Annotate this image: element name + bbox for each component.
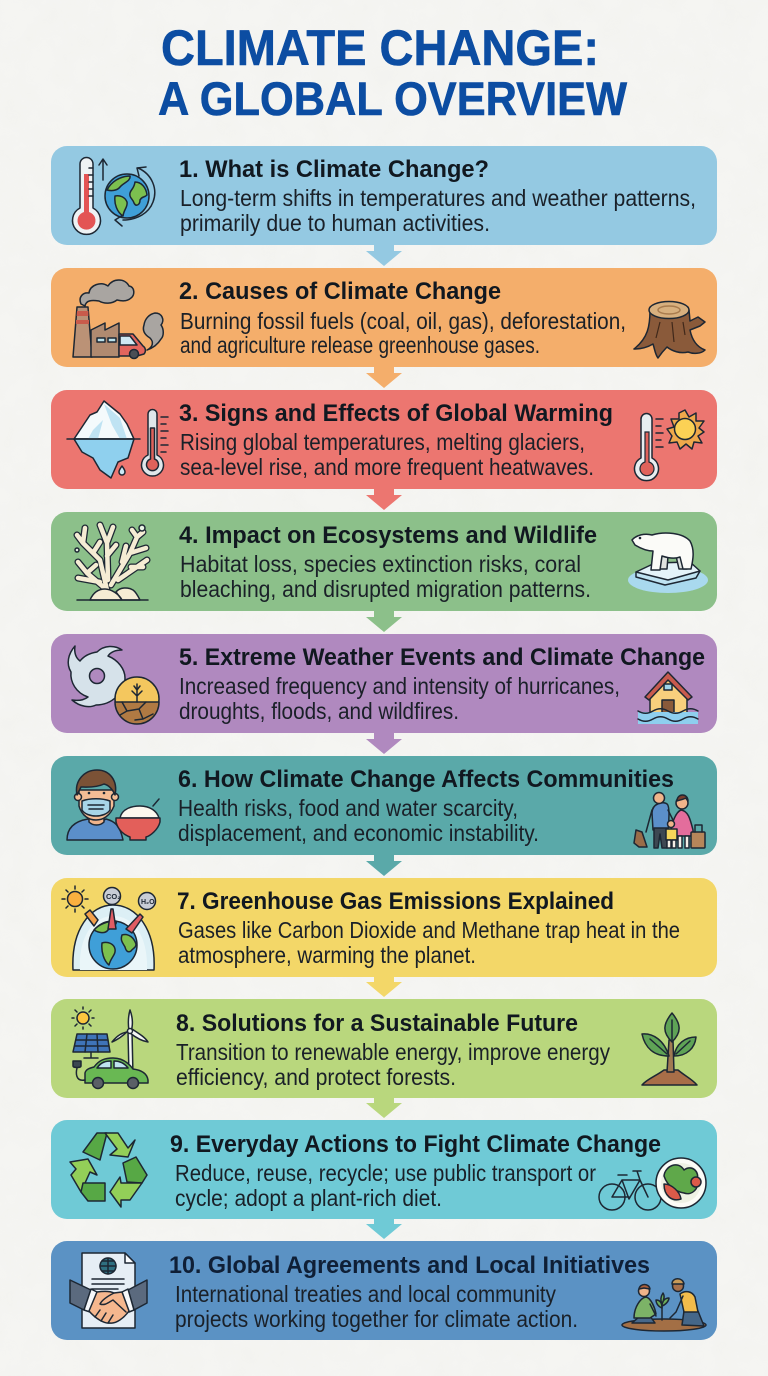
panel 10: agreements and initiatives (51, 1241, 717, 1340)
panel 3 body: Rising global temperatures, melting glaciers, (180, 429, 585, 455)
panel 9 heading: 9. Everyday Actions to Fight Climate Change (170, 1131, 661, 1158)
icon: displaced family with suitcases (634, 792, 705, 848)
panel 9 body: Reduce, reuse, recycle; use public transport or (175, 1160, 596, 1186)
panel 5 body: droughts, floods, and wildfires. (179, 698, 459, 724)
panel 8 heading: 8. Solutions for a Sustainable Future (176, 1010, 578, 1037)
panel 6 heading: 6. How Climate Change Affects Communities (178, 766, 674, 793)
panel 3 heading: 3. Signs and Effects of Global Warming (179, 400, 613, 427)
icon: recycling symbol (70, 1133, 147, 1207)
panel 6 background (51, 756, 717, 855)
panel 7 heading: 7. Greenhouse Gas Emissions Explained (177, 888, 614, 915)
panel 6 body (178, 795, 539, 846)
panel 2 background (51, 268, 717, 367)
panel 2 body: and agriculture release greenhouse gases. (180, 332, 540, 358)
arrow: panel 1 to 2 (366, 245, 402, 266)
arrow: panel 5 to 6 (366, 733, 402, 754)
icon: solar panel, wind turbine and electric car (72, 1007, 148, 1088)
arrow: panel 9 to 10 (366, 1219, 402, 1239)
panel 5 body: Increased frequency and intensity of hurricanes, (179, 673, 620, 699)
panel 7: greenhouse gases (51, 878, 717, 977)
icon: greenhouse effect diagram: H₂O (141, 899, 155, 906)
panel 8 body: Transition to renewable energy, improve energy (176, 1039, 610, 1065)
panel 1 body: primarily due to human activities. (180, 210, 490, 236)
panel 9 background (51, 1120, 717, 1219)
panel 1: what is climate change (51, 146, 717, 245)
panel 10 body (175, 1281, 578, 1332)
panel 4: ecosystems (51, 512, 717, 611)
panel 10 heading: 10. Global Agreements and Local Initiatives (169, 1252, 650, 1279)
panel 10 body: International treaties and local community (175, 1281, 556, 1307)
panel 3: signs and effects (51, 390, 717, 489)
panel 7 body: atmosphere, warming the planet. (178, 942, 476, 968)
arrow: panel 8 to 9 (366, 1098, 402, 1118)
panel 4 body: bleaching, and disrupted migration patterns. (180, 576, 591, 602)
icon: greenhouse effect diagram (62, 886, 156, 970)
icon: polar bear on ice (628, 533, 708, 593)
panel 4 background (51, 512, 717, 611)
arrow: panel 2 to 3 (366, 367, 402, 388)
icon: thermometer and rotating globe (72, 158, 155, 234)
panel 1 background (51, 146, 717, 245)
icon: tree stump (634, 302, 705, 358)
panel 8 background (51, 999, 717, 1098)
title: A GLOBAL OVERVIEW (158, 72, 628, 125)
panel 7 background (51, 878, 717, 977)
panel 1 body (180, 185, 696, 236)
icon: seedling (642, 1013, 697, 1085)
panel 3 background (51, 390, 717, 489)
panel 5: extreme weather (51, 634, 717, 733)
panel 1 heading: 1. What is Climate Change? (179, 156, 489, 183)
panel 3 body: sea-level rise, and more frequent heatwaves. (180, 454, 594, 480)
panel 10 body: projects working together for climate action. (175, 1306, 578, 1332)
panel 8 body (176, 1039, 610, 1090)
title (158, 20, 628, 125)
panel 4 heading: 4. Impact on Ecosystems and Wildlife (179, 522, 597, 549)
title: CLIMATE CHANGE: (161, 20, 599, 76)
panel 6 body: displacement, and economic instability. (178, 820, 539, 846)
panel 2 body (180, 308, 626, 358)
arrow: panel 4 to 5 (366, 611, 402, 632)
panel 10 background (51, 1241, 717, 1340)
panel 4 body (180, 551, 591, 602)
icon: flooded house (638, 672, 698, 724)
icon: thermometer and sun (635, 410, 704, 481)
panel 7 body: Gases like Carbon Dioxide and Methane trap heat in the (178, 917, 680, 943)
panel 9 body: cycle; adopt a plant-rich diet. (175, 1185, 442, 1211)
icon: two people planting a tree (622, 1279, 706, 1331)
icon: melting iceberg and thermometer (67, 401, 168, 478)
icon: factory, smoke and car (73, 280, 163, 358)
icon: bleached coral (75, 525, 148, 600)
icon: treaty document and handshake (70, 1253, 147, 1328)
panel 5 heading: 5. Extreme Weather Events and Climate Change (179, 644, 705, 671)
icon: hurricane and drought (68, 646, 159, 724)
panel 6 body: Health risks, food and water scarcity, (178, 795, 518, 821)
panel 6: communities (51, 756, 717, 855)
arrow: panel 3 to 4 (366, 489, 402, 510)
panel 8: solutions (51, 999, 717, 1098)
icon: person with mask and rice bowl (67, 770, 160, 840)
panel 5 body (179, 673, 620, 724)
icon: bicycle and salad plate (599, 1158, 706, 1210)
panel 3 body (180, 429, 594, 480)
panel 5 background (51, 634, 717, 733)
panel 2 heading: 2. Causes of Climate Change (179, 278, 501, 305)
panel 7 body (178, 917, 680, 968)
panel 9 body (175, 1160, 596, 1211)
arrow: panel 7 to 8 (366, 977, 402, 997)
icon: greenhouse effect diagram: CO₂ (106, 892, 121, 901)
arrow: panel 6 to 7 (366, 855, 402, 876)
panel 8 body: efficiency, and protect forests. (176, 1064, 456, 1090)
panel 1 body: Long-term shifts in temperatures and weather patterns, (180, 185, 696, 211)
panel 2 body: Burning fossil fuels (coal, oil, gas), deforestation, (180, 308, 626, 334)
panel 4 body: Habitat loss, species extinction risks, coral (180, 551, 581, 577)
panel 9: everyday actions (51, 1120, 717, 1219)
panel 2: causes (51, 268, 717, 367)
